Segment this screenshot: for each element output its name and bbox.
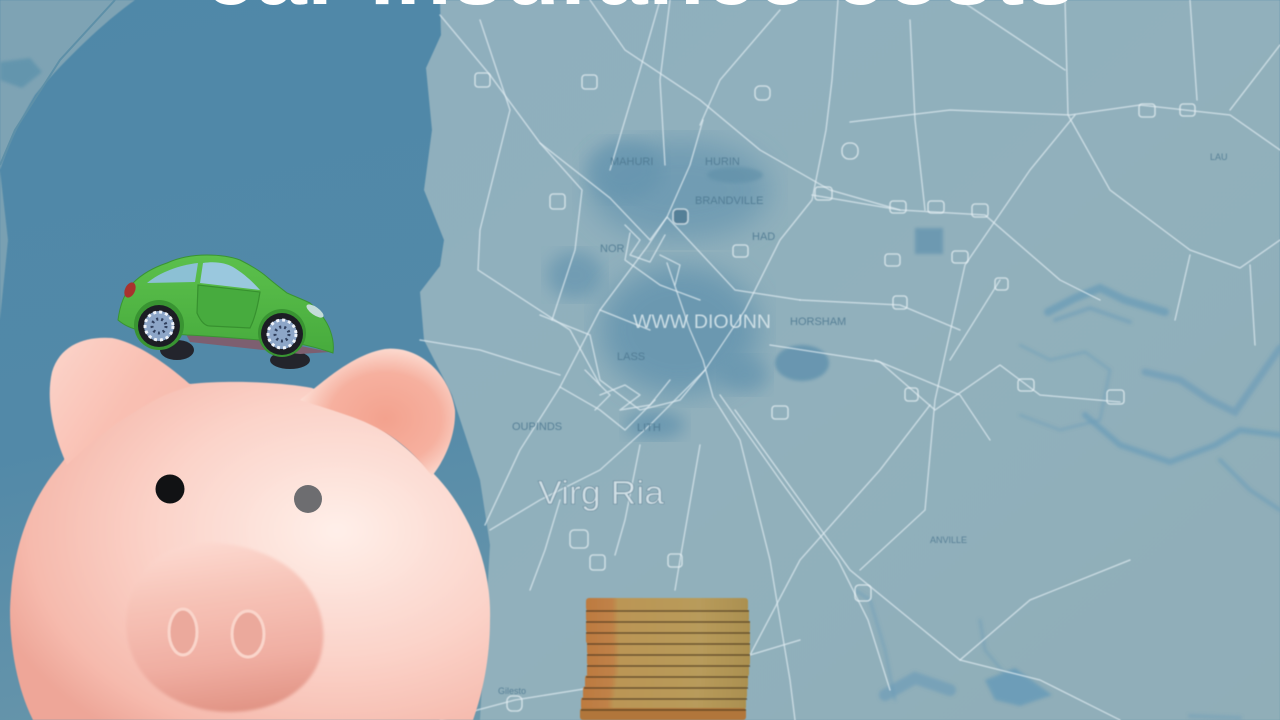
car: rear window <box>147 263 198 283</box>
car: tail light <box>122 281 138 299</box>
map: small place labels: Gilesto <box>498 686 526 696</box>
map: small place labels <box>498 152 1228 696</box>
map: small place labels: HAD <box>752 231 775 243</box>
pig: left eye <box>156 474 184 504</box>
car: front window <box>200 262 260 290</box>
map: small place labels: LASS <box>617 351 645 363</box>
map: road markers <box>475 73 1195 711</box>
car: far side wheels and underbody <box>160 332 330 369</box>
car: door <box>197 285 260 328</box>
car: headlight <box>305 302 325 320</box>
car: body <box>118 255 333 353</box>
map: small place labels: MAHURI <box>610 156 653 168</box>
pig: body <box>10 382 490 720</box>
map: small place labels: LITH <box>637 422 661 434</box>
pig: right ear <box>300 349 455 476</box>
piggy bank <box>10 338 490 720</box>
map: rivers and lakes on the east side <box>855 288 1280 718</box>
map: small place labels: LAU <box>1210 152 1228 162</box>
map: small place labels: HURIN <box>705 156 740 168</box>
map: urban and water patches <box>547 140 943 439</box>
map: place label in city centre: WWW DIOUNN <box>633 312 771 333</box>
map: small place labels: BRANDVILLE <box>695 195 763 207</box>
map: place label Virg Ria: Virg Ria <box>538 474 665 511</box>
pig: right eye <box>294 485 322 513</box>
stack of gold coins <box>580 598 750 720</box>
car: front wheel <box>258 309 306 357</box>
map: small place labels: HORSHAM <box>790 316 846 328</box>
map: small place labels: ANVILLE <box>930 535 967 545</box>
map: small place labels: NOR <box>600 243 624 255</box>
map: small place labels: OUPINDS <box>512 421 562 433</box>
car: rear wheel <box>134 300 184 350</box>
map: bottom lake <box>985 668 1052 706</box>
pig: right nostril <box>232 611 264 657</box>
map: road network <box>420 0 1280 720</box>
car on top of piggy bank <box>118 255 333 369</box>
pig: snout <box>126 543 323 712</box>
pig: left nostril <box>169 609 197 655</box>
pig: left ear <box>50 338 192 465</box>
